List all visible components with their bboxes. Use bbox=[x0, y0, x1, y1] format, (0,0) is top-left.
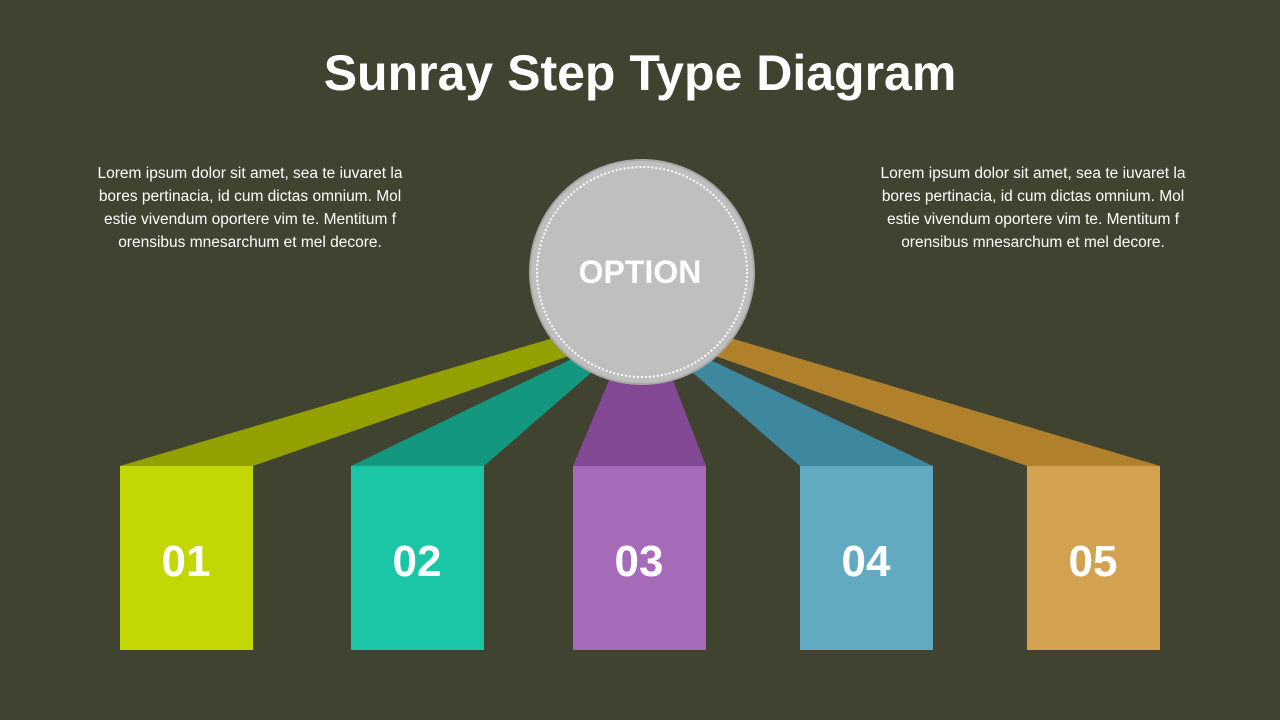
ray 3 bbox=[573, 378, 706, 466]
box 5: 05 bbox=[1069, 537, 1117, 586]
text block left: Lorem ipsum dolor sit amet, sea te iuvaret la bbox=[98, 165, 402, 182]
box 2: 02 bbox=[393, 537, 441, 586]
center circle: OPTION bbox=[579, 254, 701, 290]
box 4 bbox=[800, 466, 933, 650]
text block left: estie vivendum oportere vim te. Mentitum f bbox=[104, 211, 396, 228]
text block right bbox=[881, 165, 1186, 251]
box 1 bbox=[120, 466, 253, 650]
text block right: bores pertinacia, id cum dictas omnium. Mol bbox=[882, 188, 1184, 205]
text block left: bores pertinacia, id cum dictas omnium. Mol bbox=[99, 188, 401, 205]
ray 4 bbox=[684, 355, 933, 466]
text block right: Lorem ipsum dolor sit amet, sea te iuvaret la bbox=[881, 165, 1185, 182]
ray 5 bbox=[704, 336, 1160, 466]
box 4: 04 bbox=[842, 537, 891, 586]
box 2 bbox=[351, 466, 484, 650]
text block left bbox=[98, 165, 402, 251]
box 5 bbox=[1027, 466, 1160, 650]
ray 1 bbox=[120, 336, 580, 466]
title: Sunray Step Type Diagram bbox=[324, 45, 956, 101]
box 1: 01 bbox=[162, 537, 210, 586]
box 3: 03 bbox=[615, 537, 663, 586]
text block left: orensibus mnesarchum et mel decore. bbox=[118, 234, 382, 251]
box 3 bbox=[573, 466, 706, 650]
text block right: orensibus mnesarchum et mel decore. bbox=[901, 234, 1165, 251]
ray 2 bbox=[351, 355, 600, 466]
center circle bbox=[530, 160, 754, 384]
text block right: estie vivendum oportere vim te. Mentitum f bbox=[887, 211, 1179, 228]
